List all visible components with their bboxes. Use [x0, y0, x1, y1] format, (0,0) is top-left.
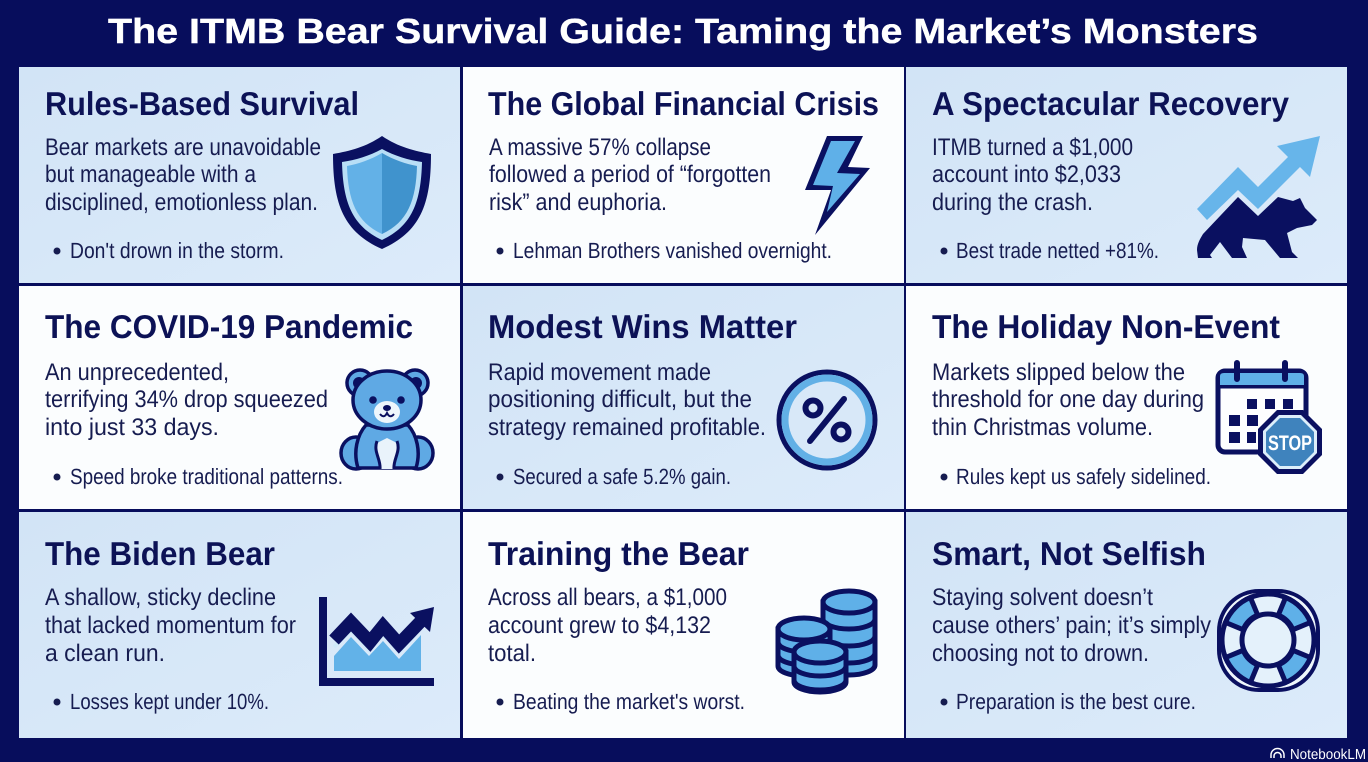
- body text: Bear markets are unavoidable: [45, 134, 321, 161]
- body text: that lacked momentum for: [45, 612, 296, 639]
- body text: [932, 359, 1204, 441]
- body text: a clean run.: [45, 640, 165, 667]
- bullet: Best trade netted +81%.: [956, 238, 1159, 263]
- stop label: STOP: [1268, 432, 1312, 455]
- icon: lightning bolt: [805, 136, 870, 235]
- body text: threshold for one day during: [932, 386, 1204, 413]
- panel: A Spectacular Recovery: [906, 67, 1347, 283]
- panel: Modest Wins Matter: [463, 286, 904, 509]
- panel: The COVID-19 Pandemic: [19, 286, 460, 509]
- icon: coin stacks: [778, 591, 875, 692]
- icon: teddy bear: [341, 370, 433, 469]
- body text: but manageable with a: [45, 161, 257, 188]
- heading: Training the Bear: [488, 535, 749, 572]
- bullet: Losses kept under 10%.: [70, 689, 269, 714]
- body text: Across all bears, a $1,000: [488, 584, 727, 611]
- body text: [932, 584, 1211, 667]
- body text: into just 33 days.: [45, 414, 219, 441]
- bullet: Lehman Brothers vanished overnight.: [513, 238, 832, 263]
- body text: account into $2,033: [932, 161, 1121, 188]
- panel: The Global Financial Crisis: [463, 67, 904, 283]
- body text: during the crash.: [932, 189, 1093, 216]
- body text: [45, 584, 296, 667]
- bullet: Secured a safe 5.2% gain.: [513, 464, 731, 489]
- body text: [45, 359, 328, 441]
- body text: [932, 134, 1133, 216]
- body text: disciplined, emotionless plan.: [45, 189, 318, 216]
- body text: total.: [488, 640, 536, 667]
- icon: percent badge: [779, 372, 875, 468]
- bullet: Speed broke traditional patterns.: [70, 464, 343, 489]
- bullet: Beating the market's worst.: [513, 689, 745, 714]
- body text: A massive 57% collapse: [489, 134, 711, 161]
- heading: The Global Financial Crisis: [488, 85, 879, 122]
- body text: terrifying 34% drop squeezed: [45, 386, 328, 413]
- icon: shield: [333, 136, 431, 249]
- heading: The Holiday Non-Event: [932, 308, 1280, 345]
- icon: calendar with stop sign: [1218, 363, 1322, 474]
- body text: Markets slipped below the: [932, 359, 1185, 386]
- heading: Modest Wins Matter: [488, 308, 797, 345]
- body text: Rapid movement made: [488, 359, 711, 386]
- body text: risk” and euphoria.: [489, 189, 667, 216]
- heading: The Biden Bear: [45, 535, 275, 572]
- body text: account grew to $4,132: [488, 612, 711, 639]
- body text: An unprecedented,: [45, 359, 229, 386]
- title: The ITMB Bear Survival Guide: Taming the Market’s Monsters: [108, 12, 1258, 51]
- panel: The Holiday Non-Event: [906, 286, 1347, 509]
- body text: A shallow, sticky decline: [45, 584, 276, 611]
- panel: Rules-Based Survival: [19, 67, 460, 283]
- body text: [488, 584, 727, 667]
- icon: life ring: [1219, 591, 1318, 690]
- body text: followed a period of “forgotten: [489, 161, 771, 188]
- panel: Training the Bear: [463, 512, 904, 738]
- heading: Rules-Based Survival: [45, 85, 359, 122]
- body text: ITMB turned a $1,000: [932, 134, 1133, 161]
- body text: thin Christmas volume.: [932, 414, 1153, 441]
- bullet: Rules kept us safely sidelined.: [956, 464, 1211, 489]
- body text: choosing not to drown.: [932, 640, 1149, 667]
- heading: Smart, Not Selfish: [932, 535, 1206, 572]
- body text: Staying solvent doesn’t: [932, 584, 1153, 611]
- bullet: Don't drown in the storm.: [70, 238, 284, 263]
- heading: A Spectacular Recovery: [932, 85, 1290, 122]
- body text: strategy remained profitable.: [488, 414, 766, 441]
- icon: rising line chart: [319, 597, 434, 686]
- body text: [489, 134, 771, 216]
- panel: Smart, Not Selfish: [906, 512, 1347, 738]
- body text: cause others’ pain; it’s simply: [932, 612, 1211, 639]
- heading: The COVID-19 Pandemic: [45, 308, 413, 345]
- icon: bear with rising arrow: [1197, 136, 1320, 258]
- body text: [488, 359, 766, 441]
- body text: [45, 134, 321, 216]
- panel: The Biden Bear: [19, 512, 460, 738]
- body text: positioning difficult, but the: [488, 386, 752, 413]
- bullet: Preparation is the best cure.: [956, 689, 1196, 714]
